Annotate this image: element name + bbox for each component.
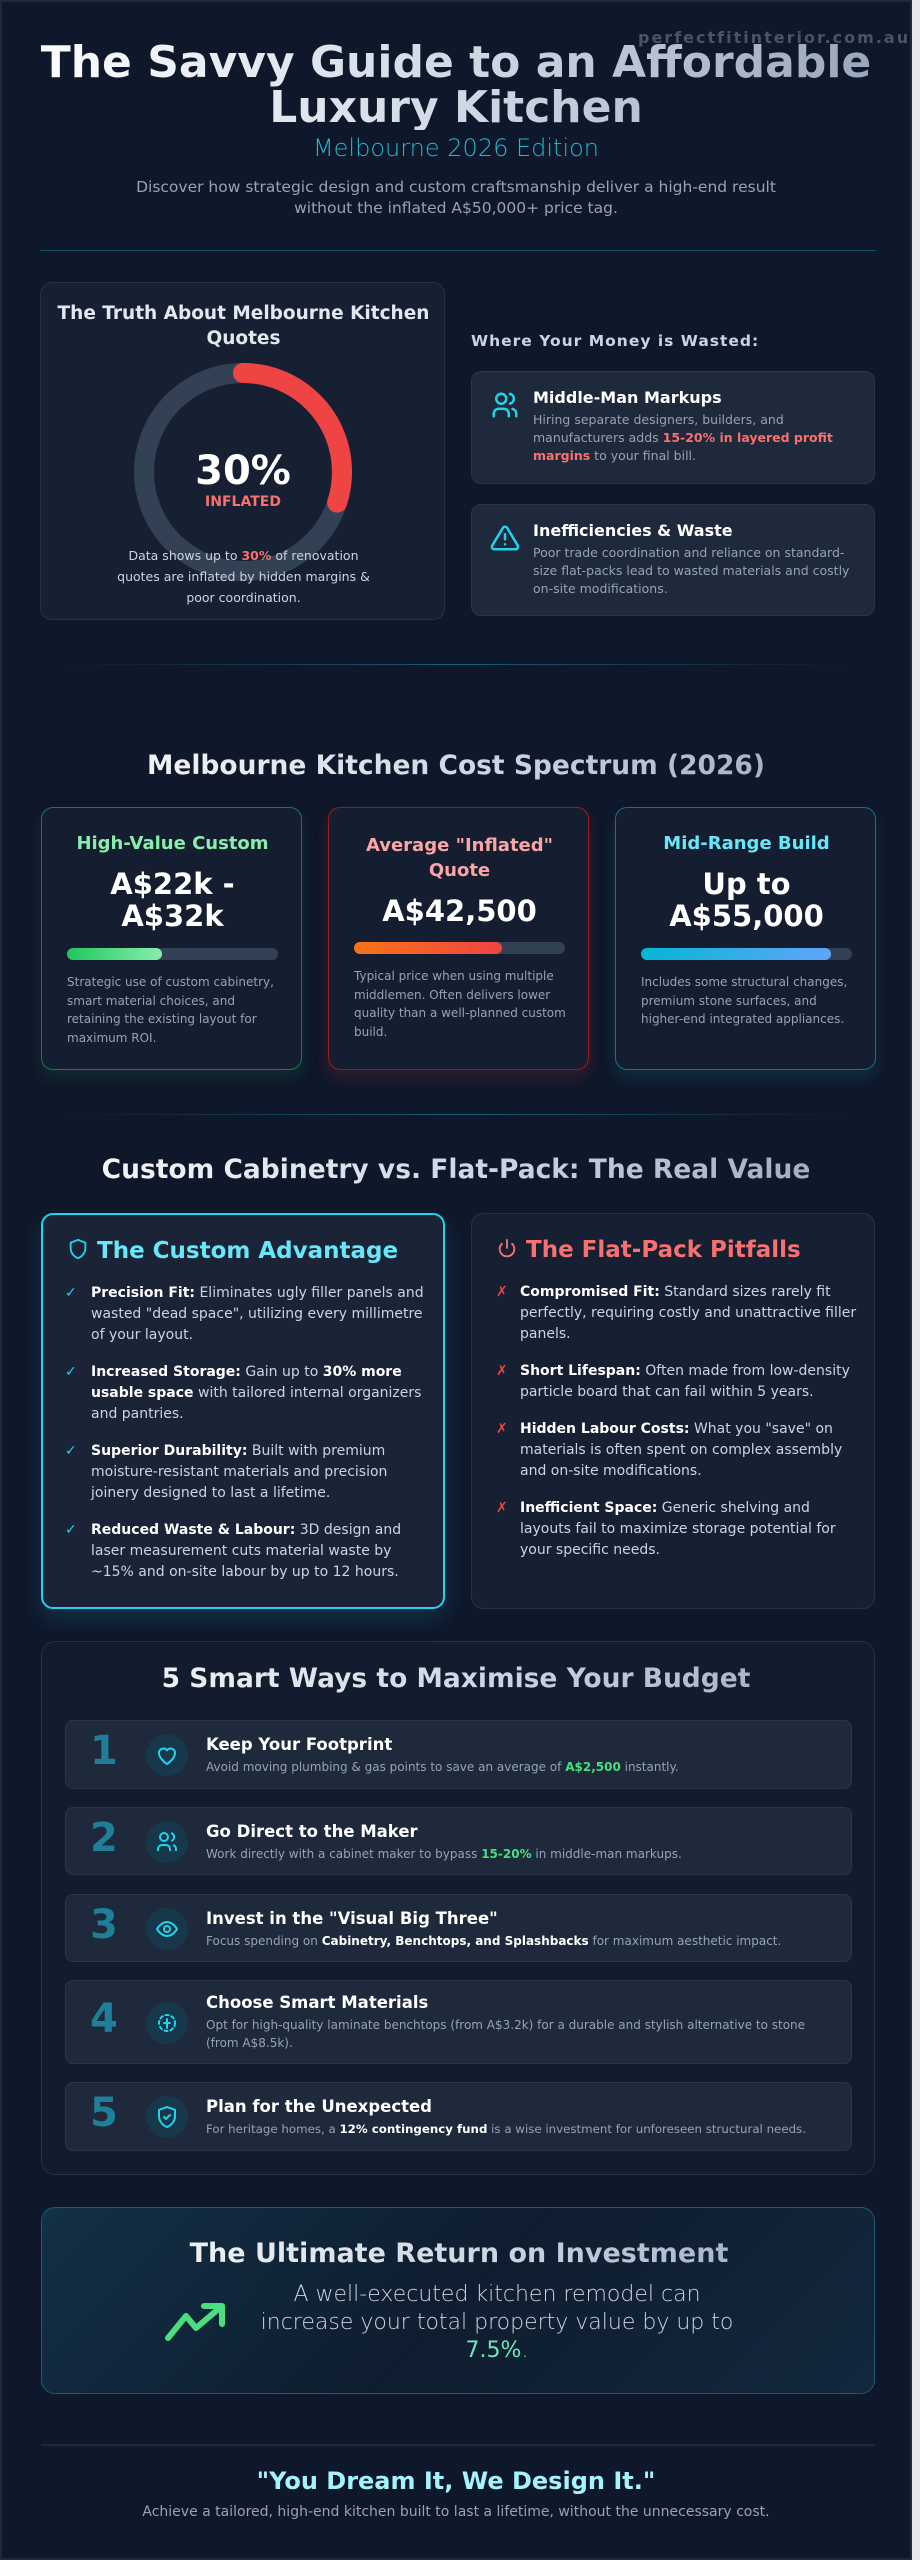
step 1: 1 xyxy=(90,1728,118,1774)
panel: flat-pack pitfalls: ✗ xyxy=(496,1421,508,1437)
panel: custom advantage: ✓ xyxy=(65,1522,77,1538)
panel: custom advantage: ✓ xyxy=(65,1443,77,1459)
footer text: Achieve a tailored, high-end kitchen built to last a lifetime, without the unnecessary cost. xyxy=(142,2504,770,2520)
card: average inflated: Average "Inflated" xyxy=(366,835,553,856)
title: Luxury Kitchen xyxy=(269,82,643,133)
donut chart: 30% xyxy=(195,448,291,494)
card: high-value custom: High-Value Custom xyxy=(76,833,269,854)
card: high-value custom: Strategic use of custom cabinetry, smart material choices, and retaining the existing layout for maximum ROI. xyxy=(67,975,274,1044)
step 5: For heritage homes, a 12% contingency fund is a wise investment for unforeseen structural needs. xyxy=(206,2122,806,2136)
panel: flat-pack pitfalls: Compromised Fit: Standard sizes rarely fit perfectly, requiring costly and unattractive filler panels. xyxy=(520,1284,856,1342)
panel: custom advantage: Precision Fit: Eliminates ugly filler panels and wasted "dead space", utilizing every millimetre of your layout. xyxy=(91,1285,424,1343)
panel: 5 smart ways xyxy=(41,1641,875,2175)
step 3: Invest in the "Visual Big Three" xyxy=(206,1909,498,1928)
heading: cost spectrum xyxy=(2,750,910,781)
title: The Savvy Guide to an Affordable xyxy=(41,37,871,88)
panel: flat-pack pitfalls: ✗ xyxy=(496,1500,508,1516)
text: Inefficiencies & Waste xyxy=(533,521,733,540)
panel: flat-pack pitfalls: Hidden Labour Costs: What you "save" on materials is often spent on complex assembly and on-site modifications. xyxy=(520,1421,842,1479)
step 4: Opt for high-quality laminate benchtops (from A$3.2k) for a durable and stylish alternative to stone (from A$8.5k). xyxy=(206,2018,805,2050)
step 4: 4 xyxy=(90,1996,118,2042)
step 2: Work directly with a cabinet maker to bypass 15-20% in middle-man markups. xyxy=(206,1847,682,1861)
step 3: 3 xyxy=(90,1902,118,1948)
card: average inflated: A$42,500 xyxy=(382,894,537,928)
card: high-value custom: A$32k xyxy=(121,899,224,933)
card: inefficiencies xyxy=(471,504,875,616)
ROI text xyxy=(261,2282,733,2363)
panel: custom advantage: Increased Storage: Gain up to 30% more usable space with tailored internal organizers and pantries. xyxy=(91,1364,421,1422)
card: mid-range: Up to xyxy=(702,867,791,901)
heading: custom vs flat-pack: Custom Cabinetry vs. Flat-Pack: The Real Value xyxy=(102,1154,810,1185)
panel: custom advantage: ✓ xyxy=(65,1285,77,1301)
panel heading: The Truth About Melbourne Kitchen xyxy=(58,303,429,324)
panel: flat-pack pitfalls: ✗ xyxy=(496,1284,508,1300)
icon: people xyxy=(492,392,518,418)
card: average inflated: Quote xyxy=(429,860,490,881)
intro text xyxy=(136,178,776,217)
text: Hiring separate designers, builders, and manufacturers adds 15-20% in layered profit margins to your final bill. xyxy=(533,412,833,463)
card: high-value custom xyxy=(41,807,302,1070)
panel heading: The Custom Advantage xyxy=(97,1238,398,1264)
footer quote: "You Dream It, We Design It." xyxy=(257,2467,655,2495)
card: high-value custom: A$22k - xyxy=(110,867,235,901)
panel: truth about quotes xyxy=(40,282,445,620)
panel: flat-pack pitfalls xyxy=(471,1213,875,1609)
step 2 xyxy=(65,1807,852,1875)
card: middle-man markups xyxy=(471,371,875,484)
panel: flat-pack pitfalls: Inefficient Space: Generic shelving and layouts fail to maximize storage potential for your specific needs. xyxy=(520,1500,836,1558)
heading: 5 smart ways: 5 Smart Ways to Maximise Your Budget xyxy=(162,1663,750,1694)
step 5: Plan for the Unexpected xyxy=(206,2097,432,2116)
ROI text: A well-executed kitchen remodel can xyxy=(293,2282,701,2307)
donut chart xyxy=(134,363,352,581)
text: Middle-Man Markups xyxy=(533,388,722,407)
icon: warning xyxy=(490,526,520,550)
step 3: Focus spending on Cabinetry, Benchtops, and Splashbacks for maximum aesthetic impact. xyxy=(206,1934,781,1948)
intro text: without the inflated A$50,000+ price tag. xyxy=(294,199,618,217)
panel: custom advantage: ✓ xyxy=(65,1364,77,1380)
step 2: 2 xyxy=(90,1815,118,1861)
text: Poor trade coordination and reliance on standard-size flat-packs lead to wasted materials and costly on-site modifications. xyxy=(533,545,849,596)
panel: custom advantage: Reduced Waste & Labour: 3D design and laser measurement cuts material waste by ~15% and on-site labour by up to 12 hours. xyxy=(91,1522,401,1580)
step 1 xyxy=(65,1720,852,1789)
watermark: perfectfitinterior.com.au xyxy=(638,28,910,47)
panel heading: Quotes xyxy=(206,328,280,349)
ROI heading xyxy=(42,2238,876,2269)
panel heading xyxy=(58,303,429,349)
heading: where money is wasted: Where Your Money is Wasted: xyxy=(471,332,759,350)
text xyxy=(533,521,849,596)
card: average inflated: Typical price when using multiple middlemen. Often delivers lower quality than a well-planned custom build. xyxy=(354,969,566,1038)
step 2: Go Direct to the Maker xyxy=(206,1822,418,1841)
step 3 xyxy=(65,1894,852,1962)
ROI text: 7.5%. xyxy=(466,2338,528,2363)
subtitle: Melbourne 2026 Edition xyxy=(313,134,599,162)
ROI text: increase your total property value by up to xyxy=(261,2310,733,2335)
panel: flat-pack pitfalls: ✗ xyxy=(496,1363,508,1379)
panel: custom advantage xyxy=(41,1213,445,1609)
step 5 xyxy=(65,2082,852,2151)
panel: ROI xyxy=(41,2207,875,2394)
card: mid-range xyxy=(615,807,876,1070)
heading: cost spectrum: Melbourne Kitchen Cost Spectrum (2026) xyxy=(147,750,765,781)
step 4: Choose Smart Materials xyxy=(206,1993,428,2012)
card: mid-range: Includes some structural changes, premium stone surfaces, and higher-end integrated appliances. xyxy=(641,975,847,1026)
card: average inflated xyxy=(328,807,589,1070)
ROI heading: The Ultimate Return on Investment xyxy=(190,2238,728,2269)
step 1: Keep Your Footprint xyxy=(206,1735,392,1754)
step 4 xyxy=(65,1980,852,2064)
step 1: Avoid moving plumbing & gas points to save an average of A$2,500 instantly. xyxy=(206,1760,679,1774)
intro text: Discover how strategic design and custom craftsmanship deliver a high-end result xyxy=(136,178,776,196)
panel: flat-pack pitfalls: Short Lifespan: Often made from low-density particle board that can fail within 5 years. xyxy=(520,1363,850,1400)
card: mid-range: Mid-Range Build xyxy=(663,833,830,854)
icon: trending up xyxy=(165,2303,225,2341)
card: mid-range: A$55,000 xyxy=(669,899,824,933)
donut chart: INFLATED xyxy=(205,494,281,510)
caption: Data shows up to 30% of renovation quotes are inflated by hidden margins & poor coordination. xyxy=(117,548,370,605)
panel: custom advantage: Superior Durability: Built with premium moisture-resistant materials and precision joinery designed to last a lifetime. xyxy=(91,1443,387,1501)
heading: 5 smart ways xyxy=(2,1663,910,1694)
title xyxy=(2,40,910,130)
step 5: 5 xyxy=(90,2090,118,2136)
text xyxy=(533,388,833,463)
panel heading: The Flat-Pack Pitfalls xyxy=(526,1237,801,1263)
